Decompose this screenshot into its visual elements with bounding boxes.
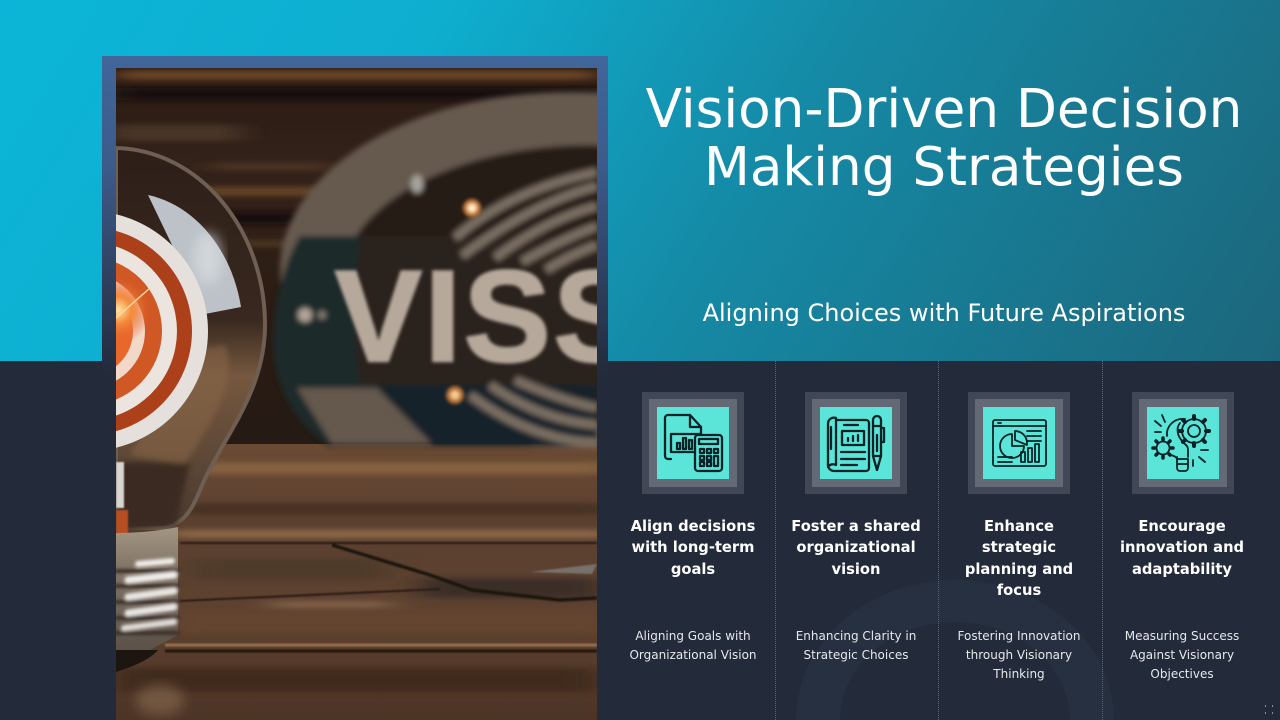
vision sign (274, 92, 860, 448)
icon: document and calculator (642, 392, 744, 494)
image frame (102, 56, 608, 373)
text: column 1: Aligning Goals with Organizational Vision (629, 629, 757, 662)
icon: lightbulb with gears (1132, 392, 1234, 494)
photo: light bulb and vision sign on wood (116, 68, 597, 720)
heading: column 1: Align decisions with long-term goals (631, 518, 755, 578)
heading: column 3: focus (997, 582, 1041, 599)
heading: column 2: Foster a shared organizational vision (791, 518, 921, 578)
heading: column 3: Enhance (984, 518, 1054, 535)
title: Vision-Driven Decision (646, 78, 1242, 140)
corner marks (1265, 705, 1273, 714)
table planks (116, 444, 610, 720)
heading: column 4: Encourage innovation and adaptability (1120, 518, 1244, 578)
icon: dashboard window (968, 392, 1070, 494)
heading: column 3: strategic (982, 539, 1056, 556)
text: column 3: Fostering Innovation through Visionary Thinking (958, 629, 1080, 681)
sign lights (446, 199, 481, 404)
light bulb (0, 148, 265, 716)
subtitle: Aligning Choices with Future Aspirations (703, 299, 1185, 327)
icon: book and pen (805, 392, 907, 494)
heading: column 3 (965, 518, 1073, 599)
title (646, 78, 1242, 198)
heading: column 3: planning and (965, 561, 1073, 578)
title: Making Strategies (704, 136, 1184, 198)
decorative arcs (790, 575, 1120, 720)
screw base (116, 527, 178, 652)
wall planks (110, 68, 597, 448)
text: column 2: Enhancing Clarity in Strategic Choices (796, 629, 916, 662)
top gradient background (0, 0, 1280, 361)
filament (116, 462, 124, 508)
target rings (0, 211, 208, 451)
bottom dark background (0, 361, 1280, 720)
highlight (148, 195, 241, 314)
text: column 4: Measuring Success Against Visionary Objectives (1125, 629, 1239, 681)
